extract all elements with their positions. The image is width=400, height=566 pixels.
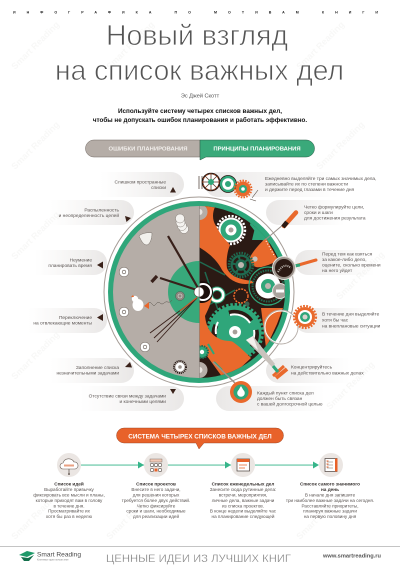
divider between halves [198,206,200,378]
text: most important list: Расставляйте приоритеты, [301,502,359,508]
watermark pattern: Smart Reading [104,489,156,541]
footer rule [0,545,400,548]
overline: infographic label: ИНФОГРАФИКА ПО МОТИВАМ КНИГИ [13,10,378,14]
icon: bottom orange pendulum [213,362,252,403]
left callout 5 [50,358,134,383]
watermark pattern: Smart Reading [9,19,61,71]
watermark pattern: Smart Reading [294,19,346,71]
icon: daily list notebook [319,453,343,477]
icon: weekly calendar [231,453,255,477]
right callout 3 [295,250,381,275]
left callout 6: Отсутствие связи между задачами [89,394,166,400]
right callout 2: для достижения результата [304,216,366,222]
subtitle [93,107,307,124]
text: ideas list: Список идей [54,480,84,486]
icon: top gear train [199,174,258,201]
text: ideas list: хотя бы раз в неделю [46,514,93,519]
text: projects list: требуется более двух действий. [122,497,190,503]
right callout 1: и держите перед глазами в течение дня [265,188,355,193]
text: ideas list: Выработайте привычку [44,486,95,492]
right callout 1: Ежедневно выделяйте три самых значимых дела, [265,175,376,182]
right callout 4 [295,308,381,333]
watermark pattern: Smart Reading [9,489,61,541]
text: ideas list [33,480,105,519]
right callout 6: Каждый пункт списка дел [257,390,314,396]
text: weekly list: личные дела, важные задачи [212,498,275,503]
orange top shape [199,204,254,284]
right callout 5 [266,358,364,383]
text: ideas list: которые приходят вам в голову [36,498,103,503]
text: weekly list: из списка проектов. [222,503,264,508]
watermark pattern: Smart Reading [294,489,346,541]
text: most important list: планируя важные задачи [303,509,357,514]
left callout 2: и неопределенность целей [59,212,119,219]
right callout 1 [205,172,376,197]
left callout 1: списки [151,186,166,191]
right callout 1: записывайте их по степени важности [265,180,348,188]
text: projects list: для реализации идей [133,513,179,519]
text: most important list: на первую половину дня [304,514,357,519]
right callout 3: Перед тем как взяться [322,252,373,258]
header pill: mistakes vs principles: ПРИНЦИПЫ ПЛАНИРОВАНИЯ [213,147,301,153]
banner: four-list system [117,428,284,449]
icon: stacked ovals [176,214,188,234]
icon: tapered pin [246,336,287,378]
left callout 5: незначительными задачами [56,372,119,376]
text: projects list [122,482,190,519]
right callout 2: сроки и шаги [304,211,333,216]
text: weekly list: встречи, мероприятия, [219,492,267,498]
footer logo [19,551,81,562]
right half: mechanism [200,206,285,378]
title [55,20,344,87]
left half: grey dial face [113,206,200,378]
footer slogan: ЦЕННЫЕ ИДЕИ ИЗ ЛУЧШИХ КНИГ [106,553,291,565]
left callout 4: на отвлекающие моменты [33,322,93,326]
central orange arm [200,296,251,376]
text: projects list: сроки и шаги, необходимые [126,509,186,514]
right callout 6: с вашей долгосрочной целью [257,400,323,408]
left arrows [97,187,176,394]
dark green gear [229,253,253,277]
dial decorations: rings and spiked gear [119,267,186,373]
text: projects list: Внесите в него задачи, [131,487,181,492]
left callout 6 [80,386,184,411]
orange top-right plate [250,238,277,267]
right callout 2 [266,200,366,225]
watermark pattern: Smart Reading [324,359,376,411]
title: Новый взгляд [106,20,288,52]
icon: heart-shaped plate [139,233,152,245]
text: projects list: Список проектов [136,482,176,486]
text: most important list: Список самого значимого [300,482,360,486]
text: weekly list [210,482,277,519]
mid green spokes [200,262,235,310]
icon: right orange gear with loop [264,306,316,344]
big green gear [208,304,262,360]
left callout 3 [35,250,107,275]
icon: screwdriver [265,212,296,240]
centre hub [194,281,213,303]
footer url: www.smartreading.ru [322,554,381,560]
right callout 5: на действительно важных делах [291,370,364,376]
right callout 2: Четко формулируйте цели, [304,204,364,210]
text: ideas list: Просматривайте их [48,508,91,514]
icon: cloud idea list [57,453,81,477]
text: weekly list: на планирование следующей [212,513,275,519]
watermark pattern: Smart Reading [104,19,156,71]
watermark pattern: Smart Reading [9,329,61,381]
watermark pattern: Smart Reading [9,119,61,171]
right callout 3: за какое-либо дело, [322,257,367,263]
left callout 1 [100,172,184,197]
white and green right gear [249,267,287,305]
clock hands [150,236,198,342]
text: projects list: Четко фиксируйте [137,502,176,508]
icon: projects grid [144,453,168,477]
text: ideas list: фиксировать все мысли и планы, [33,492,105,498]
right callout 4: В течение дня выделяйте [322,310,380,318]
clock dial outer rings [104,197,294,387]
right callout 4: на внеплановые ситуации [322,324,381,330]
right callout 6 [216,386,325,411]
left callout 1: Слишком пространные [114,180,166,186]
text: weekly list: В конце недели выделяйте час [210,508,277,514]
right callout 3: на него уйдет [322,267,353,274]
left callout 3: планировать время [48,264,92,269]
text: most important list: на день [321,487,339,492]
small ring gear [209,287,225,303]
left callout 4: Переключение [59,315,92,321]
watermark pattern: Smart Reading [334,249,386,301]
text: ideas list: в течение дня. [53,503,85,508]
icon: duck with spring [131,295,172,311]
left callout 4 [28,308,107,333]
text: most important list: В начале дня запишите [305,492,356,498]
dark green bottom-left gears [196,346,208,358]
grey half gears [200,206,208,220]
left callout 2: Распыленность [84,208,119,214]
author: Эс Джей Скотт [181,92,220,100]
header pill: mistakes vs principles: ОШИБКИ ПЛАНИРОВАНИЯ [109,147,187,153]
watermark pattern: Smart Reading [9,209,61,261]
left callout 5: Заполнение списка [76,365,119,371]
subtitle: чтобы не допускать ошибок планирования и работать эффективно. [93,116,307,124]
title: на список важных дел [55,55,344,87]
top gear [252,224,253,225]
left callout 6: и конечными целями [120,400,166,405]
right callout 4: хотя бы час [322,318,349,324]
left callout 2 [50,200,134,225]
text: most important list: три наиболее важные задачи на сегодня. [286,498,374,503]
text: most important list [286,482,374,519]
right callout 3: оцените, сколько времени [322,264,381,268]
orange right wedge [261,308,283,348]
text: weekly list: Занесите сюда рутинные дела: [210,487,276,492]
text: projects list: для решения которых [133,492,180,498]
connector line with arrows [81,462,319,468]
text: weekly list: Список еженедельных дел [212,482,274,486]
subtitle: Используйте систему четырех списков важных дел, [118,107,282,115]
left callout 3: Неумение [70,258,92,264]
header pill: mistakes vs principles [86,140,314,160]
watermark pattern: Smart Reading [314,119,366,171]
right callout 5: Концентрируйтесь [291,364,333,370]
footer logo: Smart Reading [37,552,81,558]
banner: four-list system: СИСТЕМА ЧЕТЫРЕХ СПИСКОВ ВАЖНЫХ ДЕЛ [128,433,272,440]
footer logo: Ключевые идеи лучших книг [37,558,69,562]
right callout 6: должен быть связан [257,396,303,402]
icon: magnifier [272,256,316,280]
